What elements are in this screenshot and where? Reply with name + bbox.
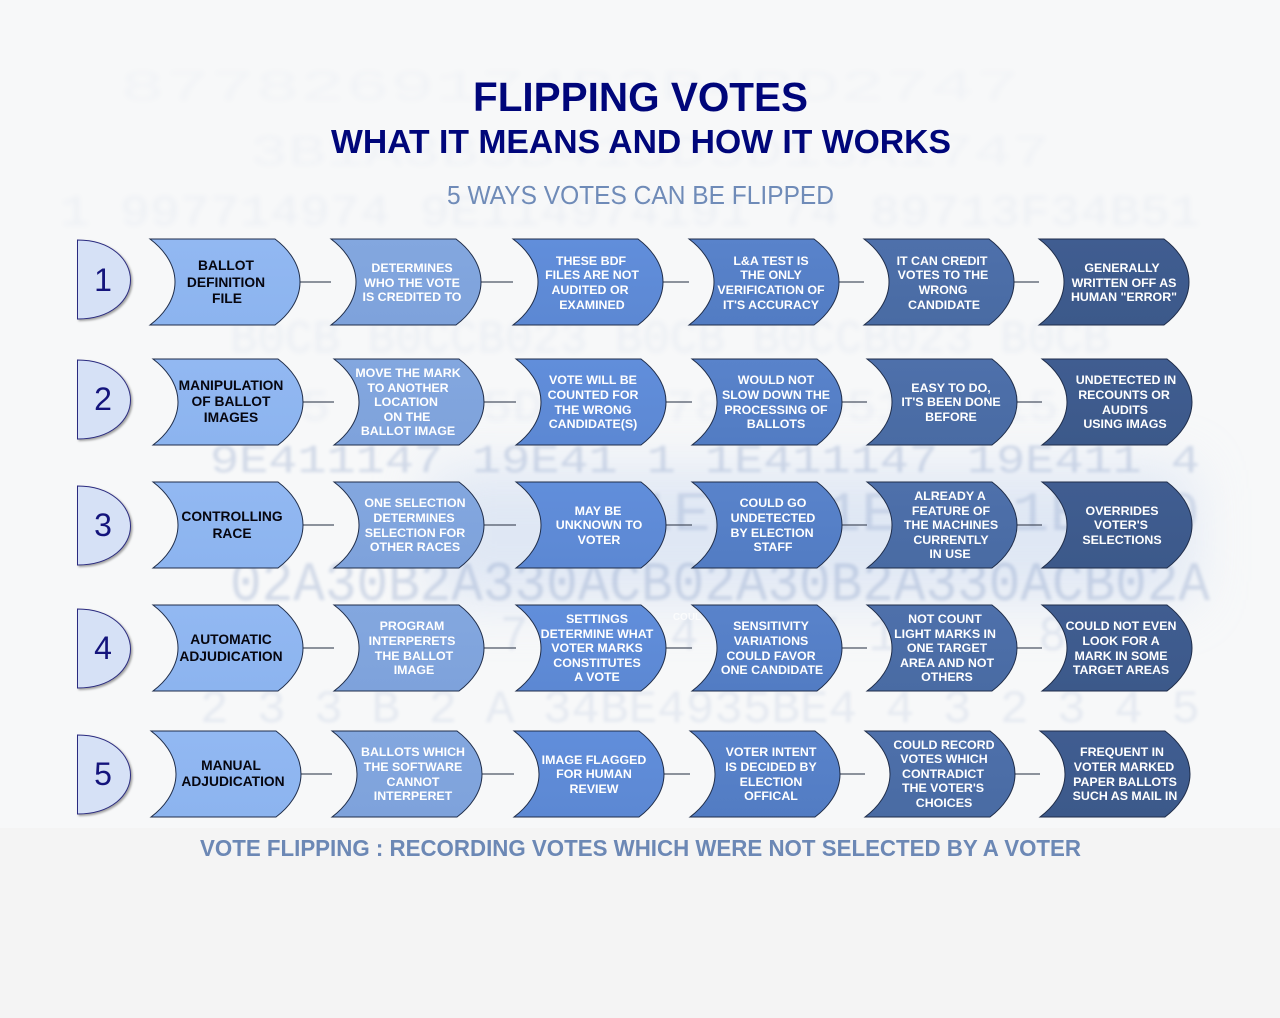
step: undetected by staff	[692, 482, 842, 568]
step: could record: VOTES WHICH	[900, 752, 988, 766]
step: sensitivity: VARIATIONS	[734, 634, 808, 648]
step: not audited: THESE BDF	[556, 254, 627, 268]
step: L&A test: VERIFICATION OF	[717, 283, 825, 297]
step: program interprets	[334, 605, 484, 691]
step: not audited: FILES ARE NOT	[545, 268, 639, 282]
step: unknown to voter	[516, 482, 666, 568]
step: undetected by staff: BY ELECTION	[730, 526, 814, 540]
step: feature of machines: CURRENTLY	[913, 533, 989, 547]
step: undetected by staff: UNDETECTED	[731, 511, 815, 525]
step: move the mark: BALLOT IMAGE	[361, 424, 455, 438]
step: wrong candidate: THE WRONG	[554, 403, 632, 417]
step: light marks: LIGHT MARKS IN	[894, 627, 996, 641]
step: ballots which	[332, 731, 482, 817]
step: overrides: SELECTIONS	[1082, 533, 1162, 547]
step: overrides: OVERRIDES	[1086, 504, 1158, 518]
step: credit wrong candidate: VOTES TO THE	[898, 268, 988, 282]
step: settings: DETERMINE WHAT	[541, 627, 654, 641]
step: voter intent	[690, 731, 840, 817]
step: image flagged: FOR HUMAN	[556, 767, 632, 781]
row 1: ballot definition file	[78, 239, 1189, 325]
step: not audited: EXAMINED	[559, 298, 625, 312]
step: wrong candidate: CANDIDATE(S)	[549, 417, 637, 431]
step: undetected: UNDETECTED IN	[1076, 373, 1176, 387]
step: undetected by staff: COULD GO	[740, 496, 807, 510]
step: credit wrong candidate: WRONG	[919, 283, 967, 297]
step: could not even look: TARGET AREAS	[1073, 663, 1169, 677]
step: feature of machines: IN USE	[929, 547, 971, 561]
step: would not slow: WOULD NOT	[738, 373, 815, 387]
step: not audited	[513, 239, 663, 325]
step: move the mark: TO ANOTHER	[367, 381, 449, 395]
number tab 3: 3	[94, 507, 112, 543]
step: settings: A VOTE	[574, 670, 620, 684]
step: one selection: SELECTION FOR	[365, 526, 465, 540]
step: undetected: AUDITS	[1102, 403, 1148, 417]
row 2: manipulation of ballot images	[78, 359, 1192, 445]
number tab 2: 2	[94, 381, 112, 417]
number tab 5	[78, 735, 130, 814]
step: would not slow	[692, 359, 842, 445]
step: credit wrong candidate	[864, 239, 1014, 325]
background: faint blurred ballot image code: 9E411147 19E41 1 1E411147 19E411 4	[210, 440, 1200, 485]
step: unknown to voter: VOTER	[578, 533, 620, 547]
step: automatic adjudication	[153, 605, 303, 691]
step: manipulation: OF BALLOT	[192, 394, 271, 409]
step: one selection: DETERMINES	[373, 511, 455, 525]
step: move the mark: ON THE	[384, 410, 430, 424]
step: voter intent: ELECTION	[740, 775, 802, 789]
step: feature of machines: ALREADY A	[914, 489, 986, 503]
step: frequent in mail in: VOTER MARKED	[1074, 760, 1174, 774]
step: undetected	[1042, 359, 1192, 445]
step: sensitivity: COULD FAVOR	[726, 649, 816, 663]
step: easy to do: IT'S BEEN DONE	[901, 395, 1001, 409]
step: image flagged: IMAGE FLAGGED	[542, 753, 646, 767]
step: program interprets: THE BALLOT	[375, 649, 454, 663]
number tab 4	[78, 609, 130, 688]
step: ballot definition file: DEFINITION	[187, 275, 265, 290]
section heading: 5 WAYS VOTES CAN BE FLIPPED	[447, 182, 834, 210]
step: written off: GENERALLY	[1084, 261, 1160, 275]
step: one selection: OTHER RACES	[370, 540, 460, 554]
subtitle: WHAT IT MEANS AND HOW IT WORKS	[331, 124, 951, 161]
step: frequent in mail in	[1040, 731, 1190, 817]
step: manual adjudication	[151, 731, 301, 817]
step: undetected: USING IMAGS	[1083, 417, 1167, 431]
step: determines who: IS CREDITED TO	[363, 290, 462, 304]
step: light marks	[867, 605, 1017, 691]
step: could not even look: MARK IN SOME	[1075, 649, 1167, 663]
connector lines row 3	[303, 524, 1042, 526]
step: settings	[516, 605, 666, 691]
background: faint blurred ballot image code: B0CB B0CCB023 B0CB B0CCB023 B0CB	[230, 314, 1110, 366]
step: image flagged: REVIEW	[570, 782, 619, 796]
step: could not even look: COULD NOT EVEN	[1066, 619, 1176, 633]
step: L&A test: L&A TEST IS	[733, 254, 809, 268]
step: written off	[1039, 239, 1189, 325]
number tab 3	[78, 486, 130, 565]
step: manipulation: MANIPULATION	[179, 378, 283, 393]
number tab 4: 4	[94, 630, 112, 666]
step: manipulation: IMAGES	[204, 410, 258, 425]
step: written off: HUMAN "ERROR"	[1071, 290, 1177, 304]
step: ballots which: BALLOTS WHICH	[361, 745, 465, 759]
step: ballot definition file: BALLOT	[198, 258, 255, 273]
step: one selection	[334, 482, 484, 568]
step: controlling race	[153, 482, 303, 568]
step: program interprets: INTERPERETS	[369, 634, 455, 648]
step: settings: SETTINGS	[566, 612, 628, 626]
step: ballots which: CANNOT	[386, 775, 440, 789]
step: feature of machines	[867, 482, 1017, 568]
step: would not slow: BALLOTS	[747, 417, 805, 431]
step: overrides	[1042, 482, 1192, 568]
step: would not slow: PROCESSING OF	[724, 403, 828, 417]
step: move the mark	[334, 359, 484, 445]
connector lines row 4	[303, 647, 1042, 649]
step: easy to do: BEFORE	[925, 410, 977, 424]
step: light marks: AREA AND NOT	[900, 656, 994, 670]
step: voter intent: VOTER INTENT	[726, 745, 817, 759]
number tab 2	[78, 360, 130, 439]
step: L&A test: IT'S ACCURACY	[723, 298, 820, 312]
step: sensitivity: ONE CANDIDATE	[721, 663, 823, 677]
row 3: controlling race	[78, 482, 1192, 568]
number tab 1: 1	[94, 262, 112, 298]
step: easy to do	[867, 359, 1017, 445]
step: one selection: ONE SELECTION	[364, 496, 466, 510]
step: controlling race: CONTROLLING	[181, 509, 283, 524]
step: could record: THE VOTER'S	[902, 781, 984, 795]
step: automatic adjudication: AUTOMATIC	[190, 632, 272, 647]
background: faint blurred ballot image code: 2 3 3 B 2 A 34BE4935BE4 4 3 2 3 4 5	[200, 684, 1200, 736]
step: voter intent: IS DECIDED BY	[725, 760, 818, 774]
title: FLIPPING VOTES	[473, 74, 808, 120]
background: faint blurred ballot image code: 3B1A3B3B413D5D13A1747	[250, 129, 1050, 179]
step: voter intent: OFFICAL	[744, 789, 798, 803]
step: unknown to voter: UNKNOWN TO	[556, 518, 643, 532]
background: faint blurred ballot image code: AC1EFA01EFA01EFA0	[560, 483, 1200, 547]
background: faint blurred ballot image code: 5 781 5D5 5 781 5D515D515 781	[300, 384, 1180, 434]
step: wrong candidate: VOTE WILL BE	[549, 373, 637, 387]
step: settings: VOTER MARKS	[551, 641, 643, 655]
step: L&A test	[689, 239, 839, 325]
step: frequent in mail in: SUCH AS MAIL IN	[1073, 789, 1177, 803]
step: sensitivity: SENSITIVITY	[733, 619, 810, 633]
step: could not even look	[1042, 605, 1192, 691]
step: controlling race: RACE	[212, 526, 252, 541]
step: could record: CONTRADICT	[902, 767, 984, 781]
row 5: manual adjudication	[78, 731, 1190, 817]
step: credit wrong candidate: CANDIDATE	[908, 298, 980, 312]
step: undetected: RECOUNTS OR	[1078, 388, 1170, 402]
step: not audited: AUDITED OR	[551, 283, 629, 297]
number tab 1	[78, 240, 130, 319]
background: faint blurred ballot image code: 7 7 1 4 8B 7 1 1 4 8 2 3	[500, 609, 1180, 666]
step: image flagged	[514, 731, 664, 817]
step: would not slow: SLOW DOWN THE	[722, 388, 830, 402]
step: feature of machines: THE MACHINES	[904, 518, 998, 532]
connector lines row 2	[303, 401, 1042, 403]
step: could record	[865, 731, 1015, 817]
step: feature of machines: FEATURE OF	[912, 504, 991, 518]
step: could not even look: LOOK FOR A	[1082, 634, 1160, 648]
step: wrong candidate	[516, 359, 666, 445]
step: could record: CHOICES	[916, 796, 972, 810]
step: move the mark: LOCATION	[374, 395, 438, 409]
step: L&A test: THE ONLY	[740, 268, 802, 282]
step: ballot definition file: FILE	[212, 291, 242, 306]
step: light marks: NOT COUNT	[908, 612, 982, 626]
step: manual adjudication: ADJUDICATION	[181, 774, 285, 789]
step: frequent in mail in: PAPER BALLOTS	[1073, 775, 1177, 789]
row 4: automatic adjudication	[78, 605, 1192, 691]
step: determines who: WHO THE VOTE	[364, 276, 460, 290]
step: wrong candidate: COUNTED FOR	[548, 388, 638, 402]
step: ballots which: INTERPERET	[374, 789, 453, 803]
step: automatic adjudication: ADJUDICATION	[179, 649, 283, 664]
footer definition: VOTE FLIPPING : RECORDING VOTES WHICH WERE NOT SELECTED BY A VOTER	[200, 835, 1081, 861]
step: ballots which: THE SOFTWARE	[364, 760, 462, 774]
step: credit wrong candidate: IT CAN CREDIT	[897, 254, 988, 268]
step: determines who	[331, 239, 481, 325]
stray faint label: COUL	[673, 612, 701, 623]
step: frequent in mail in: FREQUENT IN	[1080, 745, 1164, 759]
step: settings: CONSTITUTES	[553, 656, 641, 670]
step: determines who: DETERMINES	[371, 261, 453, 275]
step: sensitivity	[692, 605, 842, 691]
step: could record: COULD RECORD	[893, 738, 995, 752]
connector lines row 5	[301, 773, 1040, 775]
step: light marks: ONE TARGET	[907, 641, 988, 655]
step: program interprets: PROGRAM	[380, 619, 444, 633]
step: manipulation	[153, 359, 303, 445]
background: faint blurred ballot image code: 1 997714974 9E114974191 74 89713F34B51	[60, 189, 1200, 239]
step: unknown to voter: MAY BE	[575, 504, 621, 518]
step: ballot definition file	[150, 239, 300, 325]
step: easy to do: EASY TO DO,	[911, 381, 991, 395]
step: manual adjudication: MANUAL	[201, 758, 261, 773]
step: overrides: VOTER'S	[1094, 518, 1148, 532]
step: light marks: OTHERS	[921, 670, 973, 684]
step: move the mark: MOVE THE MARK	[355, 366, 461, 380]
connector lines row 1	[300, 281, 1039, 283]
background: faint blurred ballot image code: 02A30B2A330ACB02A30B2A330ACB02A	[230, 553, 1210, 617]
background: faint blurred ballot image code: 8778269174B2B4BD2747	[120, 64, 1020, 114]
step: written off: WRITTEN OFF AS	[1072, 276, 1176, 290]
number tab 5: 5	[94, 756, 112, 792]
step: undetected by staff: STAFF	[754, 540, 793, 554]
step: program interprets: IMAGE	[394, 663, 434, 677]
